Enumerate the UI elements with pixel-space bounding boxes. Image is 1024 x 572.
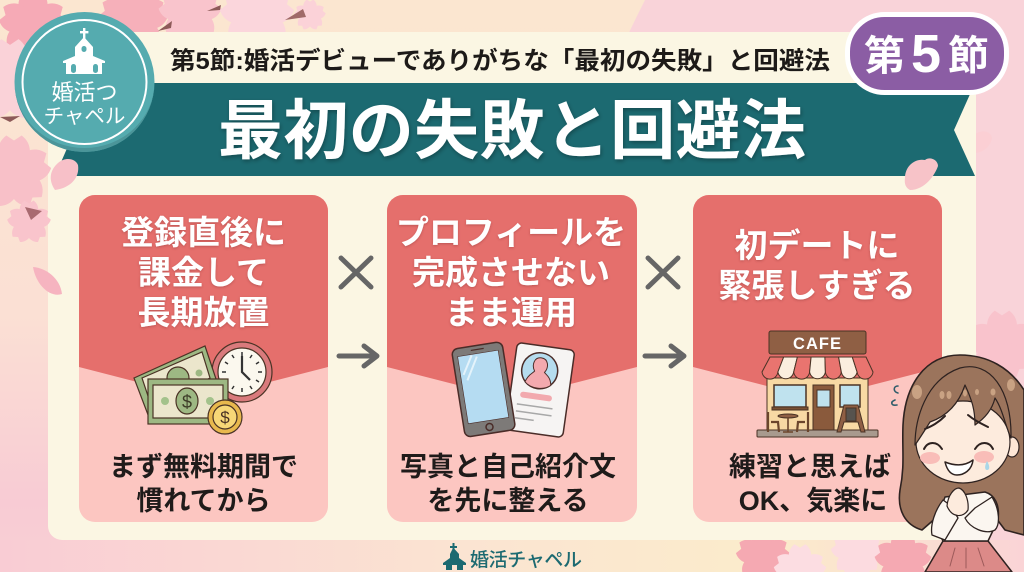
panel: card 1: $: [220, 408, 230, 427]
character: smiling nervous woman: [892, 355, 1024, 572]
eyes and brows: [924, 415, 993, 449]
left sleeve: [932, 500, 958, 540]
body text: [109, 452, 298, 516]
hair highlights: [912, 379, 1015, 399]
title: 最初の失敗と回避法: [218, 94, 806, 167]
panel: card 3: [693, 195, 942, 522]
body text: まず無料期間で: [109, 452, 298, 482]
cheeks: [920, 452, 940, 464]
icon: smartphone: [451, 341, 516, 437]
sweat drop: [985, 461, 989, 470]
icon: church: [443, 543, 466, 570]
panel: card 1: [79, 195, 328, 522]
ribbon banner: [55, 83, 975, 176]
body text: [400, 452, 616, 516]
body text: OK、気楽に: [739, 486, 887, 516]
badge: 婚活つチャペル: [14, 12, 154, 152]
heading: 長期放置: [138, 294, 270, 331]
heading: まま運用: [445, 294, 577, 331]
heading: プロフィールを: [396, 214, 626, 251]
body text: [729, 452, 891, 516]
icon: profile card: [505, 342, 575, 438]
heading: 緊張しすぎる: [718, 267, 916, 304]
icon: cafe: [757, 331, 878, 437]
panel: card 1: $: [182, 392, 192, 412]
panel: card 3: CAFE: [793, 335, 842, 353]
sweat marks: [892, 386, 898, 405]
arrows: [339, 346, 684, 366]
body text: 写真と自己紹介文: [400, 452, 616, 482]
heading: 初デートに: [734, 227, 900, 264]
cherry blossoms over panel: [0, 135, 938, 295]
blouse: [935, 492, 998, 541]
icon: money and clock: [134, 342, 272, 434]
badge: 婚活つチャペル: 婚活つ: [51, 80, 118, 105]
right sleeve: [965, 497, 998, 532]
subtitle: 第5節:婚活デビューでありがちな「最初の失敗」と回避法: [170, 46, 831, 75]
mouth: [945, 460, 973, 475]
heading: [718, 227, 916, 304]
heading: [396, 214, 626, 331]
badge: 婚活つチャペル: チャペル: [44, 105, 125, 128]
icon: church: [63, 28, 105, 74]
panel: card 2: [387, 195, 637, 522]
heading: 課金して: [138, 254, 269, 291]
footer logo: 婚活チャペル: [470, 549, 582, 571]
section pill: 節: [948, 33, 989, 79]
body text: を先に整える: [427, 486, 589, 516]
hands: [947, 488, 968, 516]
cross marks: [341, 258, 678, 287]
footer logo: [443, 543, 582, 571]
body text: 練習と思えば: [729, 452, 891, 482]
skirt: [925, 541, 1012, 572]
section pill: 5: [911, 24, 941, 84]
hair back: [899, 355, 1024, 535]
body text: 慣れてから: [136, 486, 271, 516]
section pill: [848, 14, 1006, 92]
heading: [121, 214, 286, 331]
face: [916, 401, 1010, 483]
heading: 登録直後に: [121, 214, 286, 251]
heading: 完成させない: [412, 254, 610, 291]
fringe: [915, 367, 1011, 445]
ear: [1005, 437, 1019, 457]
section pill: 第: [864, 33, 905, 79]
